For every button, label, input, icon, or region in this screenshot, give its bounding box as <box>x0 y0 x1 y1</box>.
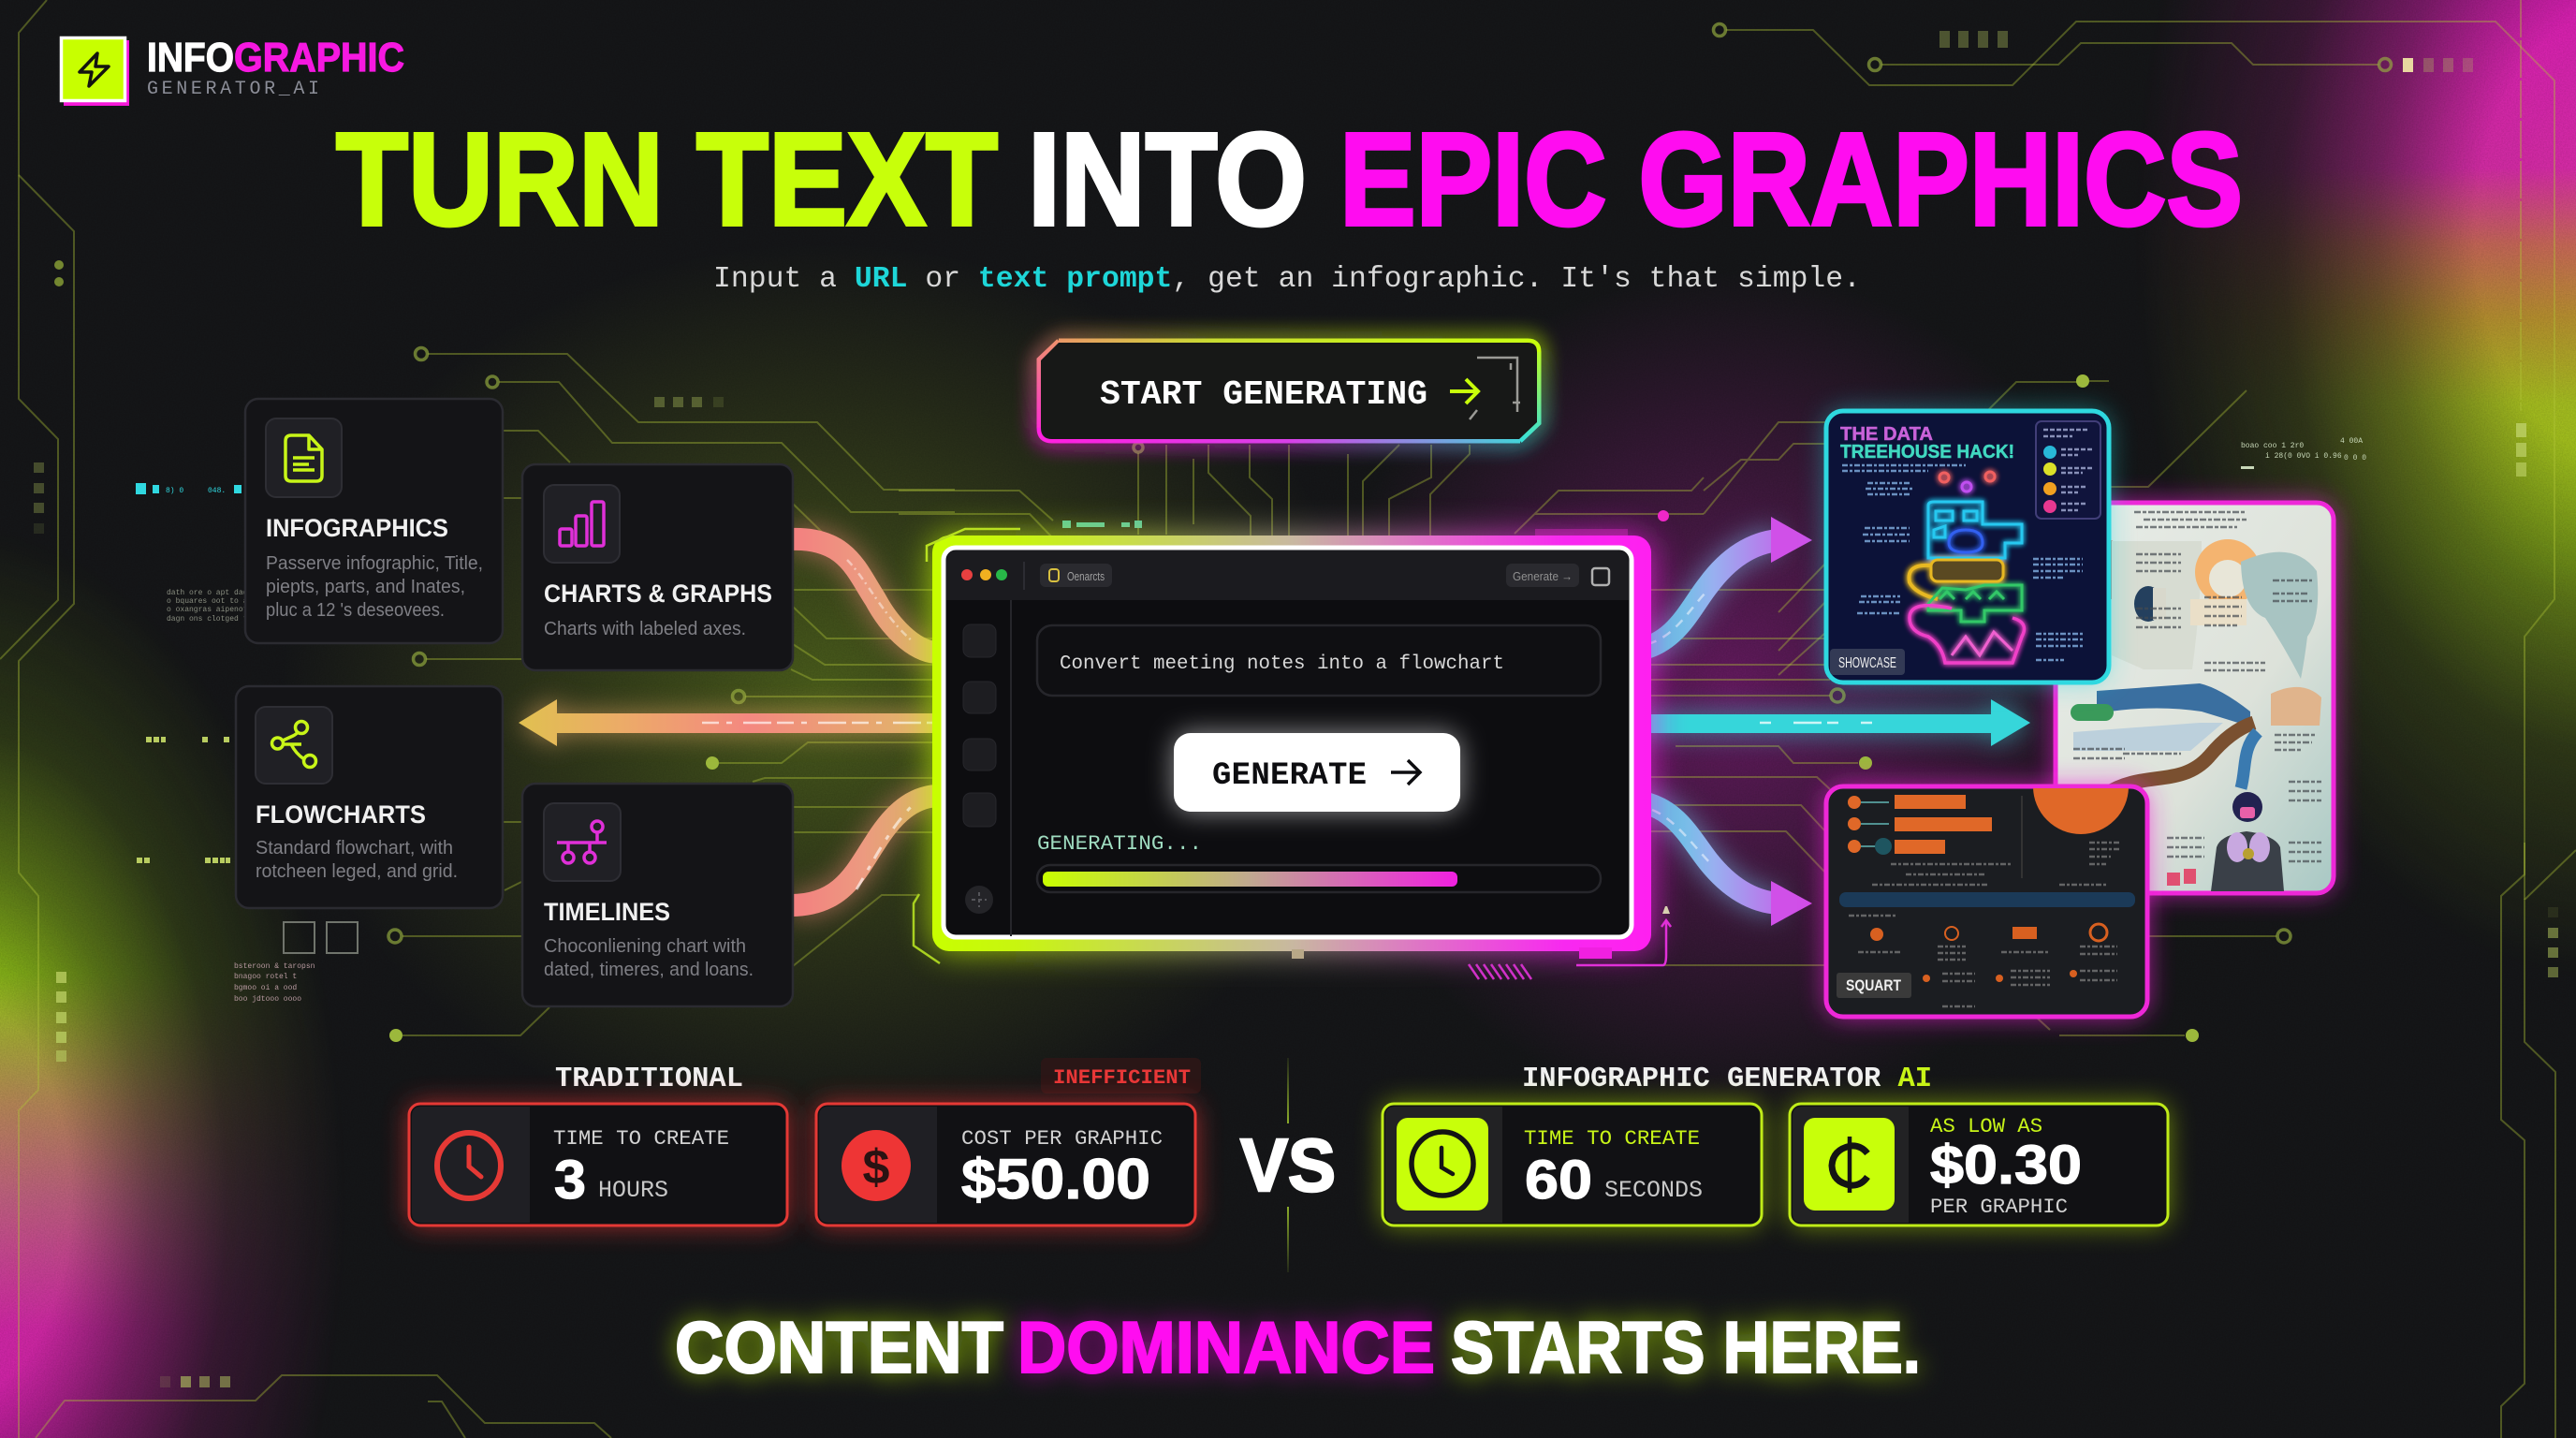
title: EPIC GRAPHICS <box>1339 105 2243 253</box>
panel: timelines <box>522 784 793 1006</box>
decorative micro text: 8) 0 <box>166 487 183 495</box>
metric value: 3 <box>554 1150 586 1211</box>
window title bar: Oenarcts <box>1067 569 1105 583</box>
showcase tag <box>1837 973 1911 998</box>
showcase legend <box>2036 421 2100 519</box>
icon: timeline <box>544 803 621 881</box>
tagline: STARTS HERE. <box>1451 1306 1921 1388</box>
panel: flowcharts <box>236 686 503 908</box>
orange circle <box>2033 739 2129 834</box>
decorative micro text: i 28(0 0VO i 0.96 <box>2265 452 2342 461</box>
icon: dollar <box>842 1130 911 1201</box>
metric label: COST PER GRAPHIC <box>961 1126 1163 1151</box>
tagline: CONTENT <box>675 1306 1003 1388</box>
neon diagram <box>1909 472 2024 663</box>
arrow: middle right flow to showcase <box>1633 699 2030 746</box>
panel: infographics <box>245 399 503 643</box>
decorative micro text: boao coo 1 2r0 <box>2241 442 2304 450</box>
metric label: TIME TO CREATE <box>553 1126 729 1151</box>
metric unit: HOURS <box>598 1177 668 1204</box>
heading: infographic generator ai: INFOGRAPHIC GENERATOR AI <box>1522 1064 1932 1095</box>
panel: ai cost <box>1790 1104 2168 1225</box>
card description: Choconliening chart with <box>544 936 746 957</box>
window glow frame <box>932 536 1651 951</box>
panel: ai time <box>1383 1104 1762 1225</box>
window outer accents <box>914 529 1671 965</box>
metric label: TIME TO CREATE <box>1524 1126 1700 1151</box>
icon: clock <box>437 1133 501 1198</box>
start generating button <box>1039 341 1539 441</box>
decorative micro text: dath ore o apt dadness <box>167 589 266 597</box>
badge: inefficient <box>1041 1058 1201 1093</box>
icon: cent sign <box>1832 1137 1867 1193</box>
card heading: FLOWCHARTS <box>256 800 426 829</box>
showcase tag: SQUART <box>1846 976 1902 994</box>
arrow: top left flow into window <box>791 539 936 653</box>
panel: traditional cost <box>816 1104 1195 1225</box>
panel: app window <box>914 529 1671 979</box>
heading: traditional: TRADITIONAL <box>555 1064 743 1095</box>
prompt input: Convert meeting notes into a flowchart <box>1060 653 1504 675</box>
decorative micro text <box>136 437 2366 1004</box>
icon: clock <box>1412 1132 1473 1196</box>
generate button: GENERATE <box>1212 758 1367 794</box>
subtitle: Input a URL or text prompt, get an infographic. It's that simple. <box>713 263 1861 296</box>
decorative micro text: bnagoo rotel t <box>234 973 297 981</box>
small chart labels <box>1849 843 2120 1006</box>
icon: dollar: $ <box>863 1140 890 1195</box>
metric label: AS LOW AS <box>1930 1114 2042 1138</box>
decorative micro text: bsteroon & taropsn <box>234 962 315 971</box>
badge: inefficient: INEFFICIENT <box>1053 1065 1191 1090</box>
card heading: CHARTS & GRAPHS <box>544 580 772 608</box>
card description: pluc a 12 's deseovees. <box>266 600 445 621</box>
card description: piepts, parts, and Inates, <box>266 577 465 597</box>
card heading: TIMELINES <box>544 898 670 926</box>
showcase callout text <box>1842 465 2083 660</box>
panel: traditional time <box>409 1104 787 1225</box>
button label: START GENERATING <box>1100 375 1427 414</box>
generating label: GENERATING... <box>1037 831 1202 856</box>
card description: Charts with labeled axes. <box>544 619 746 639</box>
window sidebar <box>963 600 1011 936</box>
generate button <box>1174 733 1460 812</box>
decorative micro text: dagn ons clotged tsutgd <box>167 615 271 624</box>
arrow: bottom left flow into window <box>791 796 936 905</box>
arrow: top right flow to showcase <box>1632 517 1812 651</box>
metric value: 60 <box>1525 1150 1592 1211</box>
decorative micro text: boo jdtooo oooo <box>234 995 301 1004</box>
metric unit: SECONDS <box>1604 1177 1703 1204</box>
window title bar: Generate → <box>1513 569 1573 583</box>
window title bar <box>946 550 1629 600</box>
button outline <box>1039 341 1539 441</box>
icon: document <box>266 418 342 497</box>
logo <box>62 35 404 106</box>
card description: Standard flowchart, with <box>256 838 453 858</box>
decorative micro text: o bquares oot to adu <box>167 597 256 606</box>
small chart icons <box>1870 924 2107 982</box>
decorative micro text: 0 0 0 <box>2344 454 2366 462</box>
title: TURN TEXT <box>336 105 998 253</box>
arrow: middle arrow to flowcharts <box>519 699 936 746</box>
icon: bar chart <box>544 485 620 563</box>
showcase tag: SHOWCASE <box>1838 655 1896 671</box>
metric value: $50.00 <box>961 1148 1150 1211</box>
panel: showcase light infographic <box>2056 503 2334 893</box>
showcase title: THE DATA <box>1840 424 1933 445</box>
card heading: INFOGRAPHICS <box>266 514 448 542</box>
metric unit: PER GRAPHIC <box>1930 1195 2068 1219</box>
logo subtitle: GENERATOR_AI <box>147 79 319 100</box>
orange bars <box>1848 795 1992 855</box>
progress bar <box>1037 865 1601 892</box>
tagline <box>675 1306 1921 1388</box>
card description: Passerve infographic, Title, <box>266 553 483 574</box>
icon: flowchart nodes <box>256 707 332 784</box>
prompt input <box>1037 625 1601 696</box>
decorative micro text: 048. <box>208 487 226 495</box>
arrow: bottom right flow to showcase <box>1632 800 1812 926</box>
vs text: VS <box>1240 1123 1336 1207</box>
metric value: $0.30 <box>1930 1135 2082 1196</box>
icon: lightning bolt <box>80 53 109 86</box>
panel: showcase data treehouse <box>1826 411 2109 682</box>
logo wordmark: GRAPHIC <box>234 35 404 81</box>
decorative micro text: o oxangras aipenot to <box>167 606 261 614</box>
logo mark <box>62 37 129 106</box>
logo wordmark: INFO <box>147 35 234 81</box>
panel: showcase dark chart <box>1826 739 2147 1017</box>
blue band <box>1839 892 2135 907</box>
showcase title: TREEHOUSE HACK! <box>1840 442 2014 462</box>
card description: dated, timeres, and loans. <box>544 960 754 980</box>
icon: arrow <box>1450 379 1478 404</box>
panel: charts and graphs <box>522 464 793 670</box>
window body <box>944 548 1632 937</box>
showcase tag <box>1830 649 1905 675</box>
tagline: DOMINANCE <box>1017 1306 1435 1388</box>
title: INTO <box>1028 105 1307 253</box>
decorative micro text: bgmoo oi a ood <box>234 984 297 992</box>
decorative micro text: 4 00A <box>2340 437 2363 446</box>
card description: rotcheen leged, and grid. <box>256 861 458 882</box>
